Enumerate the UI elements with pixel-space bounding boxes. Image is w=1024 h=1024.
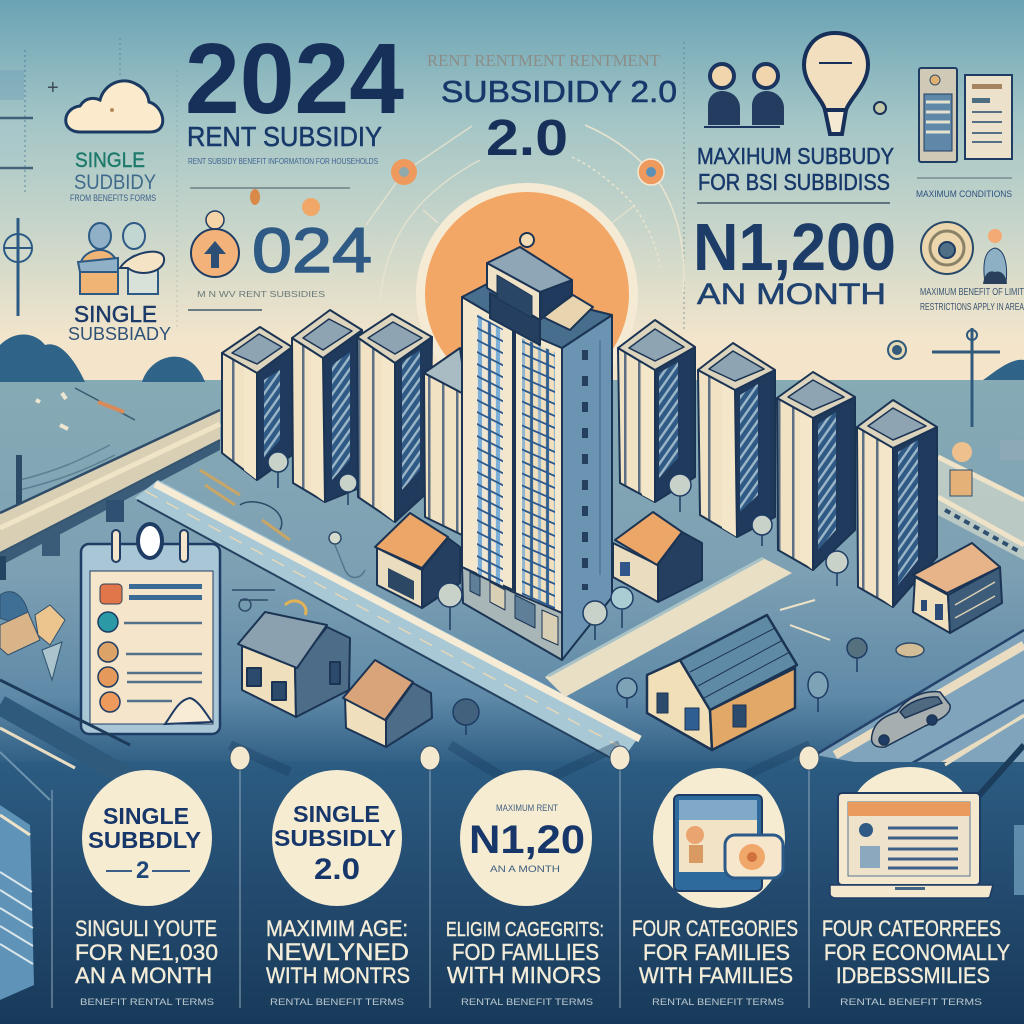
caption under 024: M N WV RENT SUBSIDIES: [197, 290, 325, 299]
band chevron shapes: [0, 680, 1024, 800]
column 2: single subsidy 2.0: RENTAL BENEFIT TERMS: [270, 997, 404, 1007]
icon: two people: [704, 64, 784, 127]
icon: target and person: [921, 222, 1007, 284]
column dividers and pins: [52, 746, 819, 1008]
right edge fragment: [1014, 825, 1024, 895]
column 1: single subsidy: 2: [136, 857, 149, 884]
house lower center large: [647, 615, 797, 750]
maximum subsidy heading: FOR BSI SUBBIDISS: [698, 169, 890, 195]
stat: N1,200 an month: N1,200: [693, 210, 896, 285]
column 1: single subsidy: SINGLE: [103, 803, 189, 829]
small sparkle: +: [47, 77, 59, 99]
column 2: single subsidy 2.0: [266, 770, 410, 1007]
tower 5: [618, 320, 695, 502]
icon: two people holding: [78, 223, 164, 294]
column 3: N1,20 stat: ELIGIM CAGEGRITS:: [446, 919, 604, 941]
icon: document panels: [919, 68, 1012, 162]
map scraps on left: [0, 592, 65, 680]
center heading: RENT RENTMENT RENTMENT: [427, 51, 661, 70]
label: single subsidy top: SUDBIDY: [74, 171, 156, 194]
column 1: single subsidy: FOR NE1,030: [75, 940, 218, 965]
column 2: single subsidy 2.0: MAXIMIM AGE:: [266, 916, 408, 941]
center heading: 2.0: [486, 109, 568, 166]
house lower left small: [343, 660, 432, 747]
lower right road: [815, 630, 1024, 770]
house by main tower right: [613, 512, 702, 602]
column 3: N1,20 stat: MAXIMUM RENT: [496, 803, 558, 813]
label: single subsidy lower: SUBSBIADY: [68, 324, 171, 344]
left pylon sketch: [0, 50, 33, 195]
column 2: single subsidy 2.0: NEWLYNED: [266, 939, 409, 966]
tower 3: [357, 314, 432, 522]
column 3: N1,20 stat: FOD FAMLLIES: [452, 939, 599, 965]
title: 2024 rent subsidy: 2024: [185, 23, 404, 135]
title: 2024 rent subsidy: RENT SUBSIDIY: [187, 121, 382, 152]
column 5: laptop icon and text: IDBEBSSMILIES: [836, 963, 990, 988]
title: 2024 rent subsidy: RENT SUBSIDY BENEFIT INFORMATION FOR HOUSEHOLDS: [188, 157, 378, 166]
scattered ground marks upper left: [20, 388, 135, 490]
right crossing road: [545, 558, 792, 697]
label: single subsidy top: [70, 149, 156, 203]
tower 1: [222, 327, 292, 480]
label: single subsidy top: FROM BENEFITS FORMS: [70, 193, 156, 203]
column 3: N1,20 stat: N1,20: [469, 818, 585, 862]
small target dot: [874, 102, 886, 114]
column 5: laptop icon and text: FOR ECONOMALLY: [824, 940, 1010, 965]
far right railing structure: [938, 440, 1024, 560]
column 1: single subsidy: [75, 770, 218, 1007]
faint vertical dividers: [120, 38, 684, 330]
maximum subsidy heading: MAXIHUM SUBBUDY: [697, 143, 894, 169]
divider with dots: [190, 188, 350, 216]
center heading: SUBSIDIDY 2.0: [441, 74, 677, 109]
column 3: N1,20 stat: [446, 770, 604, 1007]
column 1: single subsidy: SUBBDLY: [88, 827, 201, 853]
maximum subsidy heading: [697, 143, 894, 203]
column 5: laptop icon and text: RENTAL BENEFIT TERMS: [840, 997, 982, 1007]
column 4: tablet icon and text: [632, 768, 798, 1007]
icon: cloud: [66, 81, 163, 132]
column 4: tablet icon and text: FOUR CATEGORIES: [632, 916, 798, 941]
label: single subsidy lower: [68, 301, 171, 344]
ground plane: [0, 380, 1024, 765]
house lower left large: [238, 612, 350, 717]
main tall tower: [462, 233, 612, 660]
center heading: [427, 51, 677, 166]
tower 6: [698, 343, 775, 537]
caption: document panels: MAXIMUM CONDITIONS: [916, 189, 1012, 199]
left overpass road: [0, 410, 220, 580]
street trees: [268, 452, 867, 735]
tower 8: [857, 400, 937, 607]
caption: target: [920, 287, 1024, 313]
stat: 024: 024: [252, 216, 372, 286]
house by main tower left: [375, 513, 460, 608]
column 2: single subsidy 2.0: WITH MONTRS: [266, 963, 410, 988]
tower 2: [292, 310, 362, 502]
power pole and marker: [888, 328, 1000, 427]
column 3: N1,20 stat: WITH MINORS: [447, 962, 601, 988]
clipboard checklist: [81, 524, 220, 734]
column 1: single subsidy: SINGULI YOUTE: [75, 916, 217, 941]
stat: N1,200 an month: AN MONTH: [697, 278, 886, 311]
bottom band: [0, 762, 1024, 1024]
column 1: single subsidy: AN A MONTH: [75, 963, 212, 988]
icon: money bag person: [191, 211, 239, 277]
caption under 024: [188, 290, 325, 310]
column 4: tablet icon and text: WITH FAMILIES: [639, 963, 793, 988]
column 2: single subsidy 2.0: SUBSIDLY: [274, 825, 396, 851]
tower 7: [777, 372, 855, 570]
background hills: [0, 334, 1024, 382]
column 3: N1,20 stat: RENTAL BENEFIT TERMS: [461, 997, 593, 1007]
column 1: single subsidy: BENEFIT RENTAL TERMS: [80, 997, 214, 1007]
car: [872, 692, 950, 747]
sky background: [0, 0, 1024, 400]
sun circle: [416, 183, 638, 405]
label: single subsidy top: SINGLE: [75, 149, 145, 172]
left building fragment: [0, 805, 34, 1000]
column 2: single subsidy 2.0: SINGLE: [293, 801, 380, 827]
column 4: tablet icon and text: FOR FAMILIES: [643, 940, 790, 965]
courtyard clutter sketches: [200, 470, 924, 657]
house far right: [913, 543, 1002, 633]
column 3: N1,20 stat: AN A MONTH: [490, 864, 560, 874]
tower 4: [424, 348, 466, 535]
column 4: tablet icon and text: RENTAL BENEFIT TERMS: [652, 997, 784, 1007]
column 2: single subsidy 2.0: 2.0: [314, 853, 360, 886]
column 5: laptop icon and text: [822, 767, 1010, 1007]
caption: document panels: [916, 178, 1012, 199]
icon: light bulb: [804, 33, 868, 134]
connector arcs with pins: [366, 125, 684, 300]
label: single subsidy lower: SINGLE: [74, 301, 157, 327]
diagonal main road: [135, 480, 640, 763]
icon: antenna: [4, 218, 32, 316]
